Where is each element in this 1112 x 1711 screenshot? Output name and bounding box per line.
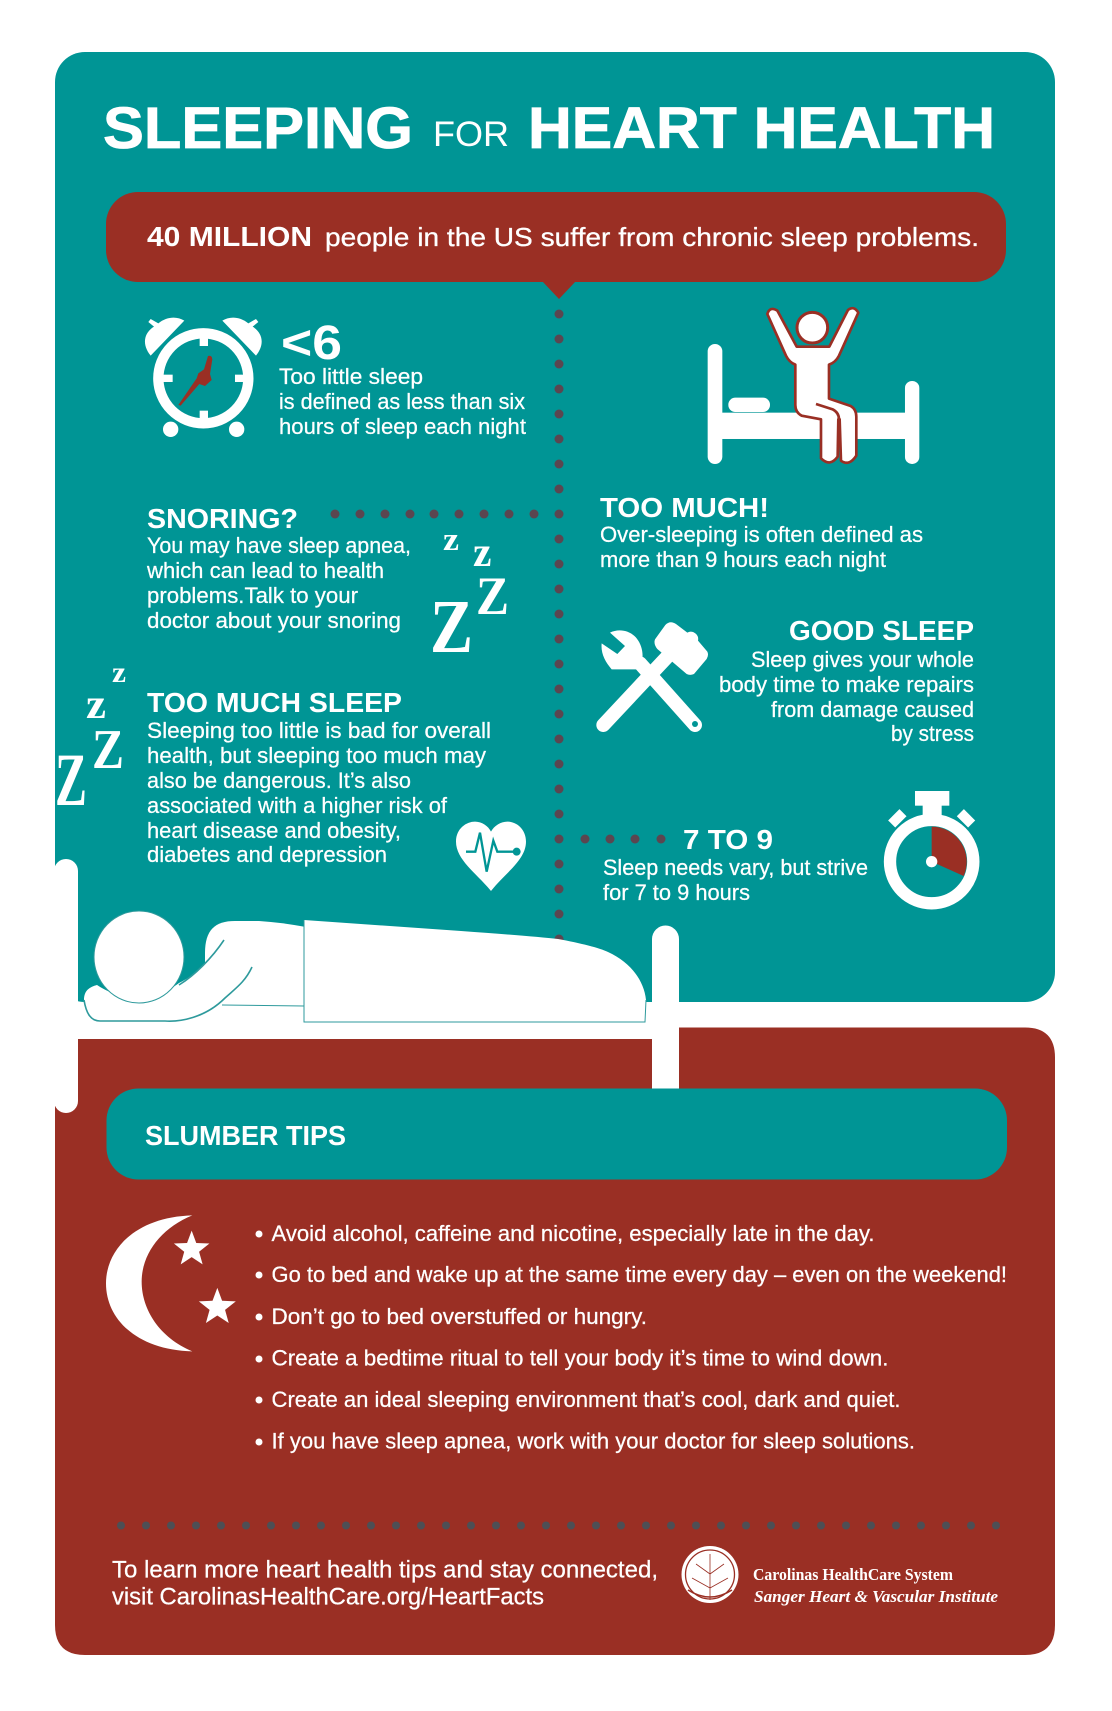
logo: tree in circle (682, 1546, 738, 1603)
title: FOR (433, 115, 509, 154)
text: too much sleep: Sleeping too little is bad for overall (147, 718, 491, 743)
panel: red bottom (55, 1028, 1055, 1655)
text: good sleep: Sleep gives your whole (751, 647, 974, 672)
text: less than six hours (279, 317, 526, 439)
text: too much sleep: health, but sleeping too much may (147, 743, 486, 768)
white mattress band (78, 1002, 1112, 1039)
text: less than six hours: Too little sleep (279, 364, 423, 389)
text: snoring: which can lead to health (146, 558, 384, 583)
tips list: Create a bedtime ritual to tell your body it’s time to wind down. (272, 1346, 888, 1370)
tips list (256, 1221, 1007, 1454)
icon: zzz snoring: Z (476, 566, 509, 626)
tips list: If you have sleep apnea, work with your doctor for sleep solutions. (272, 1428, 915, 1454)
text: less than six hours: hours of sleep each night (279, 414, 526, 439)
text: too much: Over-sleeping is often defined as (600, 522, 923, 547)
icon: zzz too much sleep: Z (92, 719, 124, 781)
dotted connector lines (330, 310, 666, 944)
logo text: organisation name (753, 1565, 998, 1606)
footer text: To learn more heart health tips and stay connected, (112, 1556, 658, 1584)
text: too much (600, 492, 923, 572)
icon: zzz too much sleep: z (112, 656, 126, 689)
text: 7 to 9 (603, 824, 868, 905)
icon: zzz too much sleep: Z (55, 739, 87, 822)
icon: heart with pulse (456, 822, 526, 891)
text: less than six hours: is defined as less than six (279, 389, 525, 414)
icon: zzz snoring: z (443, 522, 459, 558)
text: good sleep: by stress (891, 721, 974, 746)
text: too much sleep: associated with a higher risk of (147, 793, 448, 818)
logo text: organisation name: Sanger Heart & Vascular Institute (754, 1587, 998, 1606)
bed footboard post (652, 926, 679, 1089)
icon: zzz snoring: z (473, 530, 492, 576)
text: good sleep: body time to make repairs (719, 672, 974, 697)
person sleeping in bed (84, 911, 646, 1022)
heading bar: slumber tips (106, 1088, 1007, 1180)
tips list: Go to bed and wake up at the same time every day – even on the weekend! (272, 1262, 1007, 1287)
text: 7 to 9: for 7 to 9 hours (603, 880, 750, 905)
text: too much sleep: also be dangerous. It’s also (147, 768, 411, 793)
bed headboard post (54, 859, 78, 1113)
text: 7 to 9: 7 TO 9 (683, 824, 773, 855)
icon: stopwatch (888, 791, 975, 903)
icon: person sitting up on bed (708, 308, 919, 464)
text: good sleep (719, 615, 974, 746)
tips list: Create an ideal sleeping environment that’s cool, dark and quiet. (272, 1387, 900, 1412)
icon: zzz too much sleep (55, 656, 126, 822)
icon: moon and stars (106, 1215, 236, 1351)
text: snoring: You may have sleep apnea, (147, 533, 411, 558)
icon: zzz snoring: Z (430, 585, 473, 669)
callout: 40 million (106, 192, 1006, 299)
text: too much sleep: diabetes and depression (147, 842, 387, 867)
logo text: organisation name: Carolinas HealthCare System (753, 1565, 953, 1584)
title (103, 96, 995, 161)
icon: zzz snoring (430, 522, 509, 669)
title: SLEEPING (103, 96, 413, 161)
panel: teal top (55, 52, 1055, 1002)
text: too much: more than 9 hours each night (600, 547, 886, 572)
title: HEART HEALTH (528, 96, 995, 161)
icon: alarm clock (145, 318, 262, 437)
text: good sleep: GOOD SLEEP (789, 615, 974, 646)
text: snoring: SNORING? (147, 503, 298, 534)
text: too much sleep: heart disease and obesity, (147, 818, 401, 843)
text: too much sleep (147, 687, 491, 867)
tips list: Avoid alcohol, caffeine and nicotine, especially late in the day. (272, 1221, 874, 1246)
text: snoring (146, 503, 411, 633)
icon: zzz too much sleep: z (86, 682, 106, 728)
text: 7 to 9: Sleep needs vary, but strive (603, 855, 868, 880)
text: too much sleep: TOO MUCH SLEEP (147, 687, 402, 718)
footer text: visit CarolinasHealthCare.org/HeartFacts (112, 1584, 544, 1610)
text: snoring: doctor about your snoring (147, 608, 401, 633)
footer text (112, 1556, 658, 1610)
callout: 40 million: 40 MILLION (147, 221, 312, 252)
text: good sleep: from damage caused (771, 697, 974, 722)
text: snoring: problems.Talk to your (147, 583, 358, 608)
icon: wrench and hammer (602, 622, 708, 727)
callout: 40 million: people in the US suffer from chronic sleep problems. (325, 222, 979, 252)
tips list: Don’t go to bed overstuffed or hungry. (272, 1304, 647, 1329)
text: too much: TOO MUCH! (600, 492, 769, 523)
heading bar: slumber tips: SLUMBER TIPS (145, 1120, 346, 1151)
text: less than six hours: <6 (281, 317, 342, 370)
dotted divider (117, 1522, 1000, 1530)
